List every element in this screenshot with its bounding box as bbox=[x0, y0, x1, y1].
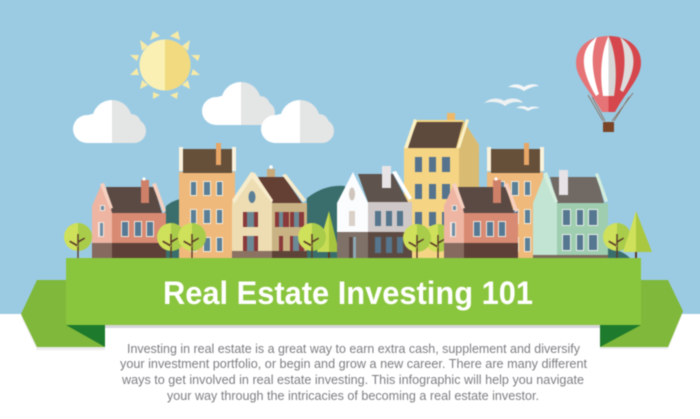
house: pink left bbox=[92, 177, 166, 258]
tree: cream house bbox=[298, 223, 326, 258]
icon: cloud right bbox=[261, 100, 334, 143]
tree: triangular left bbox=[317, 211, 339, 258]
tree: right triangular bbox=[623, 211, 652, 258]
intro text block: your investment portfolio, or begin and grow a new career. There are many different bbox=[120, 357, 588, 371]
icon: birds bbox=[484, 84, 540, 111]
title: Real Estate Investing 101 bbox=[163, 275, 533, 311]
icon: sun bbox=[130, 31, 200, 99]
tree: right round bbox=[603, 223, 631, 258]
house: cream bbox=[232, 165, 307, 258]
intro text block: ways to get involved in real estate investing. This infographic will help you navigate bbox=[121, 373, 584, 387]
page background below the sky bbox=[0, 314, 700, 419]
banner: main band bbox=[66, 258, 641, 325]
intro text block bbox=[120, 342, 588, 403]
hills behind houses bbox=[160, 186, 630, 258]
house: pink right bbox=[444, 177, 518, 258]
banner: ribbon tails bbox=[21, 280, 683, 350]
tree: pair left bbox=[157, 223, 185, 258]
intro text block: your way through the intricacies of becoming a real estate investor. bbox=[167, 389, 539, 403]
tree: pair right bbox=[178, 223, 206, 258]
tree: behind pink right bbox=[424, 224, 452, 259]
icon: cloud left bbox=[73, 100, 146, 143]
tree: left of pink house bbox=[64, 223, 92, 258]
house: mint green bbox=[533, 170, 608, 258]
tree: front of white house bbox=[403, 224, 431, 259]
icon: cloud centre bbox=[202, 82, 275, 125]
house: tall yellow bbox=[404, 113, 479, 258]
house: white bbox=[337, 166, 412, 258]
intro text block: Investing in real estate is a great way to earn extra cash, supplement and diversify bbox=[127, 342, 581, 356]
sky background bbox=[0, 0, 700, 314]
house: orange left bbox=[179, 143, 236, 258]
icon: hot air balloon bbox=[576, 36, 641, 132]
house: orange right bbox=[487, 143, 544, 258]
